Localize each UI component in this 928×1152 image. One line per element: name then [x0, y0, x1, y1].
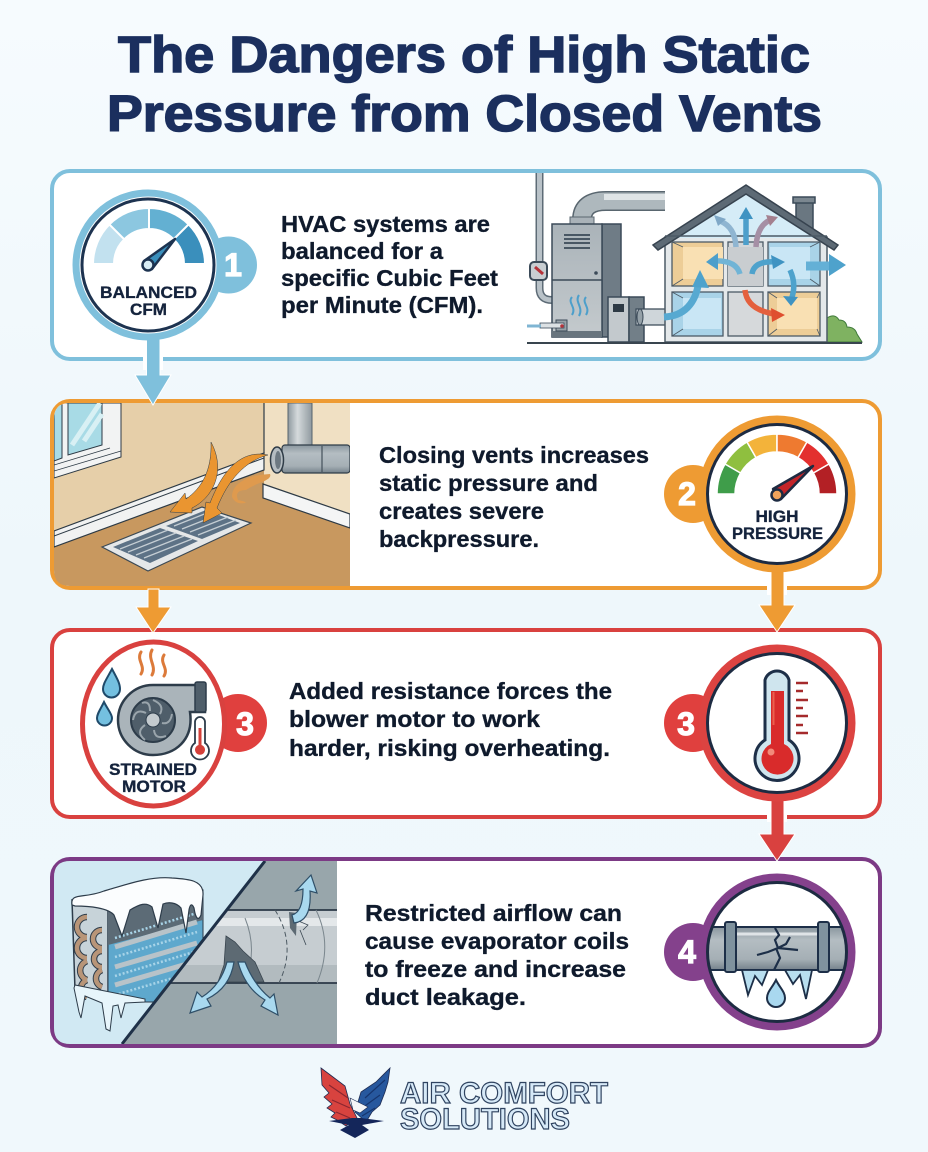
icon: strained motor with badge 3: 3 — [236, 706, 254, 742]
text: blower motor description: blower motor to work — [289, 706, 541, 732]
icon: cracked frozen pipe with badge 4 — [664, 878, 854, 1026]
gauge: high pressure with badge 2: 2 — [678, 476, 696, 512]
gauge: high pressure with badge 2: PRESSURE — [732, 525, 823, 543]
panel: freezing and leakage — [52, 859, 880, 1046]
text: balanced CFM description: per Minute (CFM). — [281, 292, 483, 318]
logo: Air Comfort Solutions — [321, 1068, 608, 1138]
illustration: furnace and house airflow — [527, 173, 862, 343]
gauge: high pressure with badge 2: HIGH — [756, 508, 798, 526]
text: closing vents description: Closing vents increases — [379, 442, 649, 468]
title: Pressure from Closed Vents — [107, 85, 822, 142]
gauge: balanced CFM with badge 1: BALANCED — [100, 284, 197, 302]
text: freezing and leakage description: Restricted airflow can — [365, 900, 622, 926]
panel: closing vents — [52, 401, 880, 588]
gauge: balanced CFM with badge 1: 1 — [224, 247, 242, 283]
icon: small thermometer — [191, 717, 209, 759]
text: blower motor description: Added resistance forces the — [289, 678, 612, 704]
text: closing vents description: backpressure. — [379, 526, 539, 552]
text: balanced CFM description: balanced for a — [281, 238, 444, 264]
icon: strained motor with badge 3: STRAINED — [109, 761, 197, 779]
logo: Air Comfort Solutions: SOLUTIONS — [400, 1103, 570, 1136]
icon: blower housing — [118, 682, 206, 755]
panel: blower motor — [52, 630, 880, 817]
arrow: step 2 to step 3 right — [759, 560, 795, 632]
icon: heat waves — [140, 650, 165, 676]
illustration: frozen coil and leaking duct — [54, 861, 337, 1044]
gauge: high pressure with badge 2 — [664, 420, 851, 568]
icon: thermometer with badge 3 — [664, 649, 851, 797]
icon: water drops — [97, 669, 120, 726]
text: balanced CFM description — [281, 211, 498, 318]
icon: thermometer with badge 3: 3 — [677, 706, 695, 742]
gauge: balanced CFM with badge 1: CFM — [130, 301, 167, 319]
icon: cracked frozen pipe with badge 4: 4 — [678, 934, 696, 970]
title: The Dangers of High Static — [118, 26, 810, 83]
arrow: step 1 to step 2 — [135, 335, 171, 405]
text: blower motor description: harder, risking overheating. — [289, 735, 610, 761]
illustration: closed floor vent with backpressure — [54, 403, 350, 586]
logo: Air Comfort Solutions: AIR COMFORT — [400, 1077, 608, 1110]
text: closing vents description: static pressure and — [379, 470, 598, 496]
text: freezing and leakage description: cause evaporator coils — [365, 928, 629, 954]
text: balanced CFM description: HVAC systems are — [281, 211, 490, 237]
icon: strained motor with badge 3 — [82, 642, 267, 806]
text: freezing and leakage description: duct leakage. — [365, 984, 526, 1010]
panel: balanced CFM — [52, 171, 880, 359]
text: closing vents description: creates severe — [379, 498, 544, 524]
arrow: step 2 to step 3 left — [136, 589, 171, 633]
title — [107, 26, 822, 142]
icon: eagle — [321, 1068, 390, 1138]
arrow: step 3 to step 4 — [759, 790, 795, 861]
icon: strained motor with badge 3: MOTOR — [122, 778, 186, 796]
text: balanced CFM description: specific Cubic Feet — [281, 265, 498, 291]
text: freezing and leakage description: to freeze and increase — [365, 956, 626, 982]
gauge: balanced CFM with badge 1 — [76, 193, 257, 337]
text: closing vents description — [379, 442, 649, 552]
text: freezing and leakage description — [365, 900, 629, 1010]
text: blower motor description — [289, 678, 612, 761]
